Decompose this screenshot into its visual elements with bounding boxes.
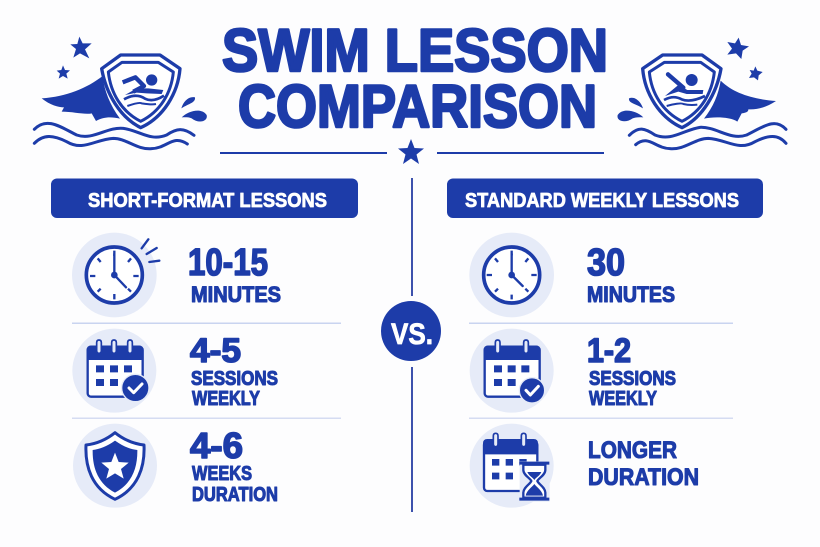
heading: standard weekly lessons [447, 178, 763, 218]
panel: standard weekly lessons [447, 178, 763, 508]
center vertical divider [411, 178, 413, 512]
label: MINUTES [191, 282, 281, 307]
icon: clock with motion lines [72, 233, 159, 317]
label: WEEKS [192, 462, 252, 485]
row: 1-2 sessions weekly [470, 329, 676, 413]
emblem: right swimmer shield [617, 38, 786, 149]
value: 4-6 [190, 425, 243, 466]
value: 1-2 [587, 332, 631, 370]
vs badge [381, 301, 441, 361]
row: 1-2 sessions weekly: WEEKLY [589, 387, 657, 410]
icon: shield with star [73, 424, 157, 508]
title [222, 17, 608, 140]
title divider with star [220, 139, 604, 164]
row: 4-5 sessions weekly [72, 329, 278, 413]
title: COMPARISON [238, 73, 597, 140]
title: SWIM LESSON [222, 17, 608, 84]
row: 4-6 weeks duration [73, 424, 278, 508]
label: SESSIONS [589, 367, 676, 390]
label: SESSIONS [191, 367, 278, 390]
vs badge: VS. [391, 318, 433, 351]
value: 4-5 [190, 332, 241, 370]
row: 4-6 weeks duration: DURATION [192, 483, 278, 506]
icon: clock [469, 233, 554, 317]
label: MINUTES [587, 282, 675, 307]
heading: short-format lessons [51, 178, 358, 218]
icon: calendar with hourglass [470, 424, 554, 508]
value: 30 [587, 242, 625, 284]
panel: short-format lessons [51, 178, 358, 508]
icon: calendar with check [72, 329, 156, 413]
emblem: left swimmer shield [34, 37, 207, 149]
heading: standard weekly lessons: STANDARD WEEKLY LESSONS [465, 189, 739, 212]
value: 10-15 [188, 242, 268, 284]
icon: calendar with check [470, 329, 554, 413]
heading: short-format lessons: SHORT-FORMAT LESSONS [88, 189, 327, 212]
row: longer duration: DURATION [588, 464, 699, 491]
row: 10-15 minutes [72, 233, 281, 317]
row: longer duration [470, 424, 699, 508]
row: 30 minutes [469, 233, 675, 317]
row: 4-5 sessions weekly: WEEKLY [192, 387, 260, 410]
label: LONGER [588, 437, 677, 464]
